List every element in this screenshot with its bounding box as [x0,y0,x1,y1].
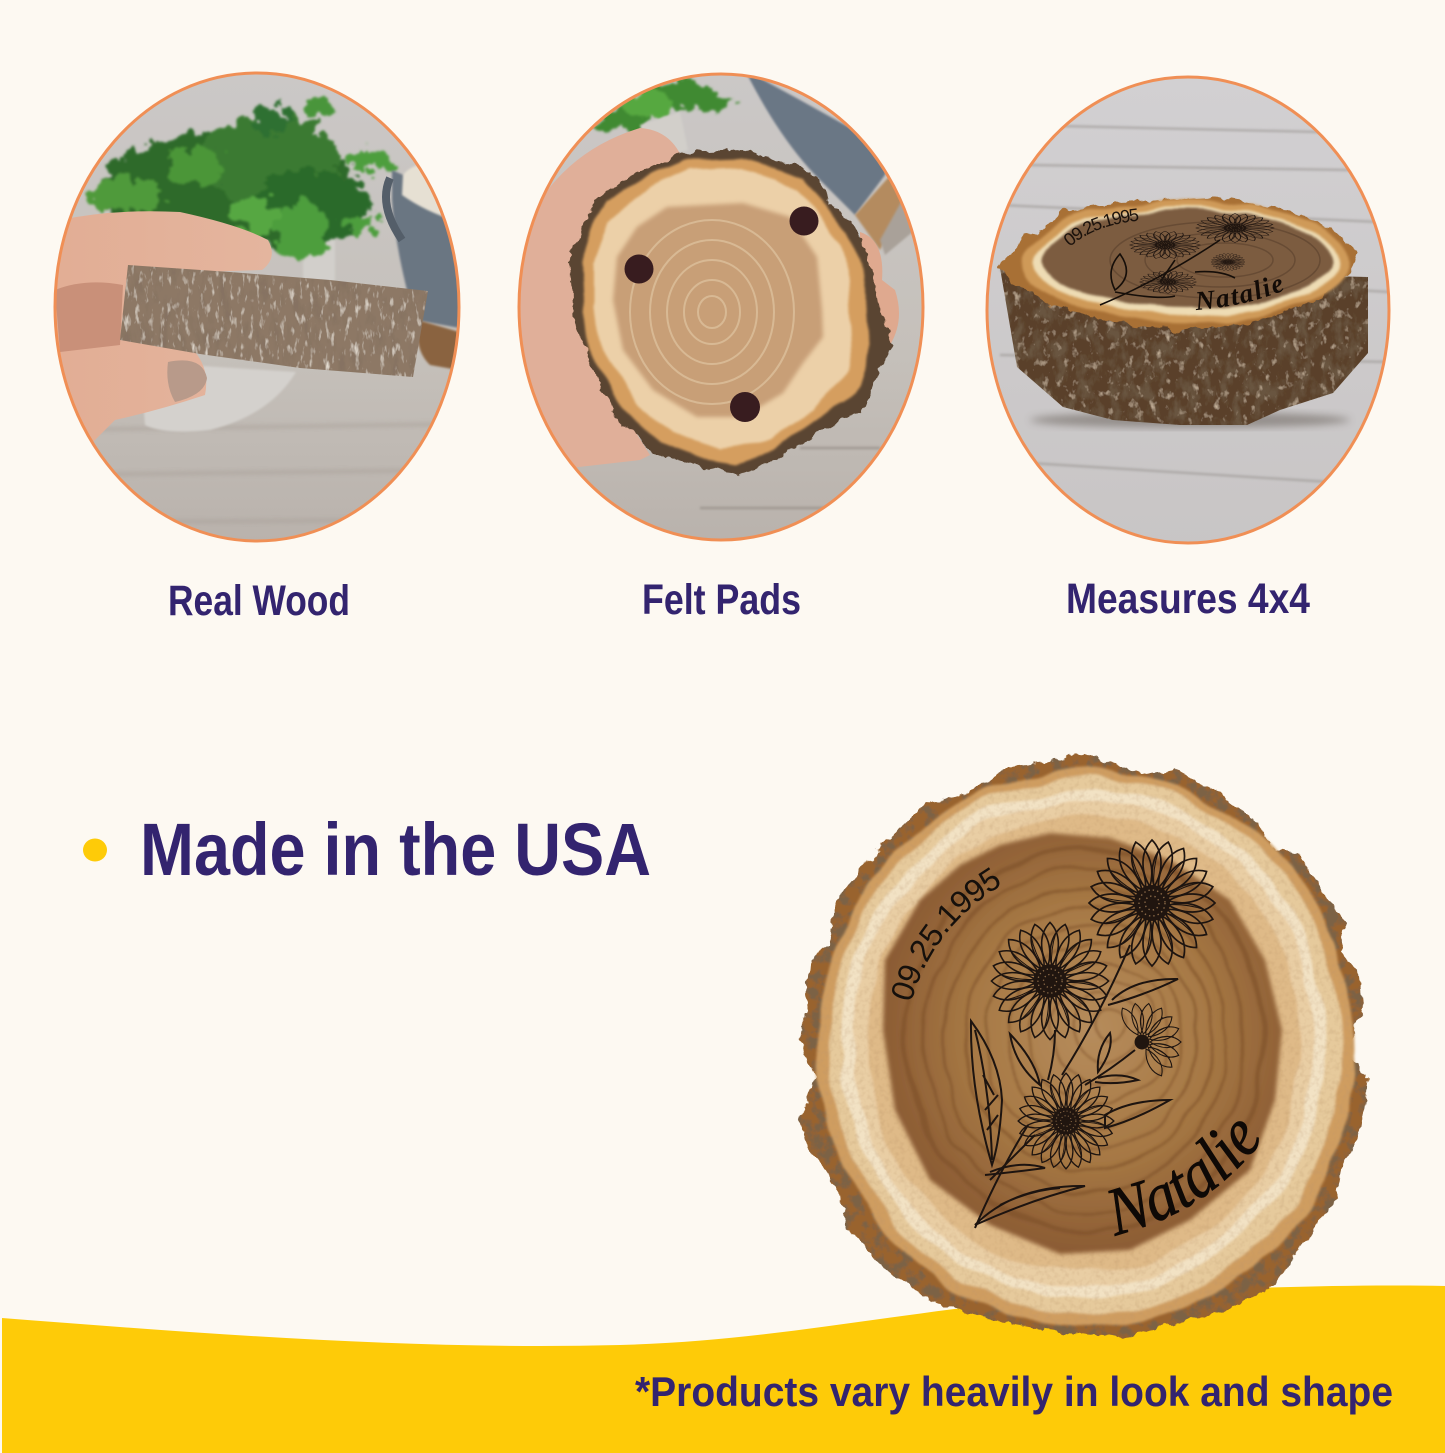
label: felt pads: Felt Pads [642,576,801,624]
panel: real wood photo [40,70,470,545]
label: real wood: Real Wood [168,577,350,625]
sapwood rings [818,770,1354,1326]
panel: measures photo [986,76,1390,544]
coaster side [1000,268,1368,425]
log side [120,265,428,377]
coaster top [1000,197,1357,330]
panel: measures photo: 09.25.1995 [1064,208,1138,245]
mug [745,70,890,215]
bark edge [800,753,1368,1338]
mug [390,170,458,329]
hand [515,128,682,468]
label: measures 4x4: Measures 4x4 [1066,575,1310,623]
panel: measures photo: Natalie [1196,278,1284,310]
engraved date: 09.25.1995 [892,867,1000,1000]
felt pads [624,254,654,284]
small side flower [1118,1003,1181,1079]
product: engraved wood slice [798,753,1370,1339]
pot [140,362,296,432]
plant [580,78,735,130]
engraved bouquet [971,840,1215,1228]
engraving [1100,213,1274,305]
slice bottom [570,150,893,475]
footnote: *Products vary heavily in look and shape [635,1368,1393,1415]
bullet dot [83,838,107,862]
yellow wave footer [2,1285,1445,1453]
coaster shadow [1030,412,1350,428]
engraved name: Natalie [1108,1121,1259,1236]
heading: made in the usa: Made in the USA [140,808,651,891]
panel: felt pads photo [515,70,930,545]
hand [56,211,272,442]
growth rings [907,848,1263,1232]
plant [85,97,394,260]
heartwood [883,833,1282,1254]
